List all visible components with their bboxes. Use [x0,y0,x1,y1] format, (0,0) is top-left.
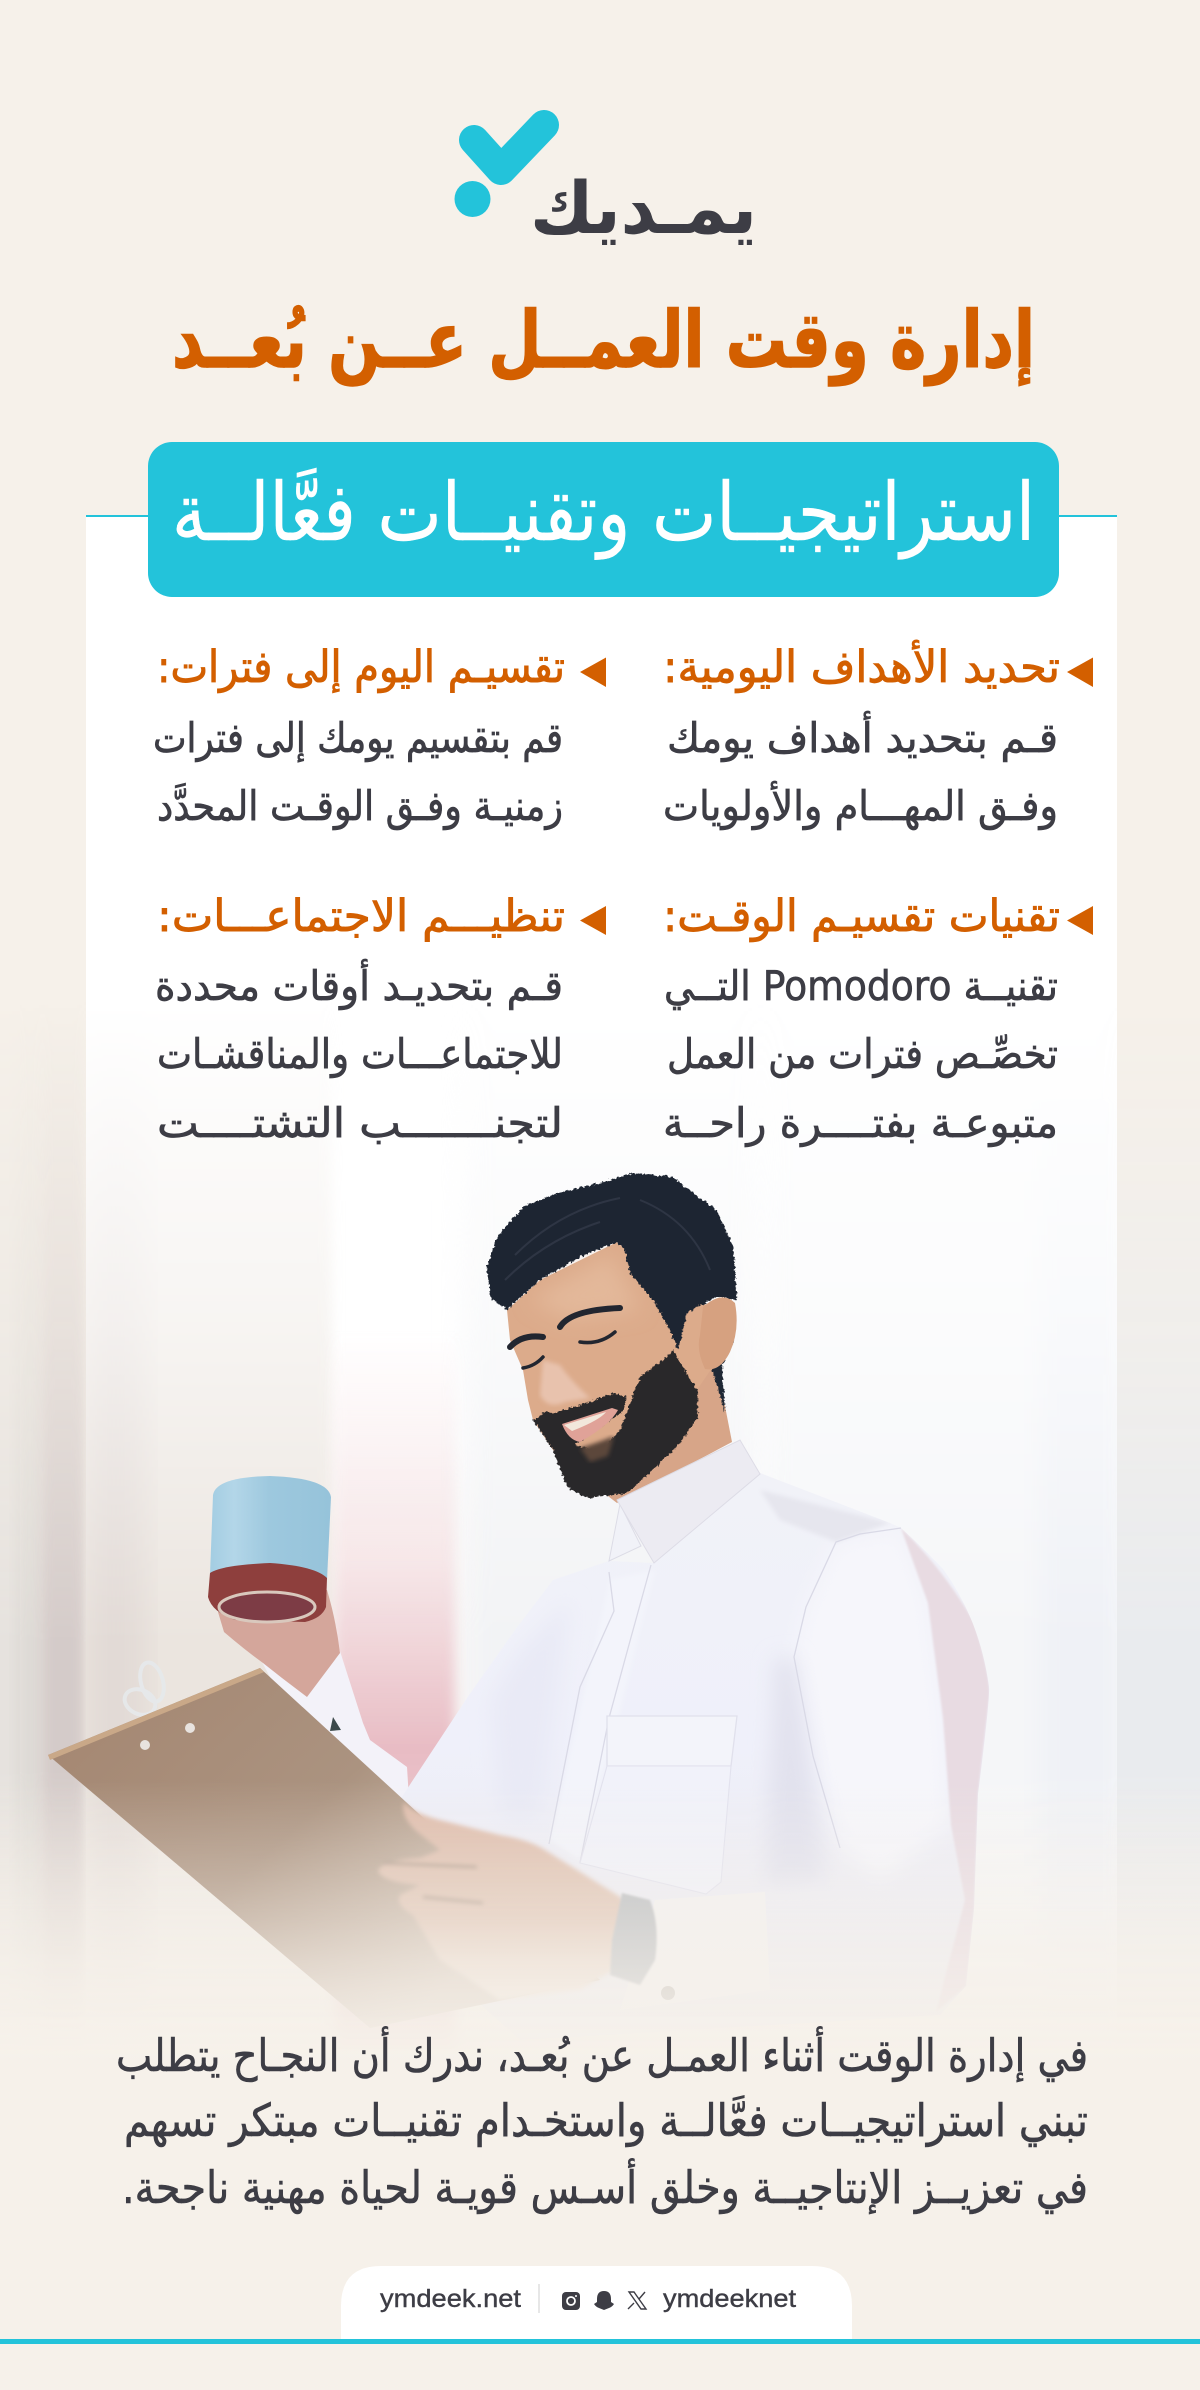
closing paragraph: في تعزيــز الإنتاجيــة وخلق أسـس قويـة لحياة مهنية ناجحة. [122,2158,1088,2215]
chest pocket [580,1716,737,1894]
shirt seams and placket lines [549,1528,901,1863]
bullet arrow [580,906,606,935]
bullet arrow [580,658,606,687]
cufflink [330,1717,341,1731]
social handle: ymdeeknet [663,2285,796,2313]
illustration: man holding mug and clipboard [48,1173,989,2040]
body text: زمنيـة وفـق الوقـت المحدَّد [157,782,563,830]
mug blue body [210,1476,331,1580]
shirt cuff at wrist [620,1892,770,2010]
footer contact pill [341,2266,852,2339]
icon: instagram [562,2292,580,2310]
mug red base [208,1563,327,1622]
mouth [562,1408,618,1442]
forehead highlight [530,1255,640,1320]
cuff button [661,1986,675,2000]
bullet arrow [1067,658,1093,687]
body text: تخصِّـص فترات من العمل [667,1030,1058,1078]
logo wordmark: يمـديك [530,166,757,250]
blurred curtain photo background, side strips [0,1156,1200,1936]
white content panel [86,517,1117,2077]
teal rule at top of panel [86,515,1117,517]
pink curtain band [335,1330,455,2050]
logo check mark [474,125,544,170]
body text: قم بتقسيم يومك إلى فترات [153,714,563,762]
body text [663,711,1058,830]
body text [155,959,563,1147]
chin tint [580,1436,614,1462]
body text: لتجنـــــــب التشتــــت [157,1099,563,1147]
hair [487,1173,737,1350]
body text: وفـق المهـــام والأولويات [663,780,1058,830]
bottom fade into page background [0,1780,1200,2080]
holding hand [378,1802,640,2000]
heading: تقسيـم اليوم إلى فترات: [157,642,565,693]
body text: قـم بتحديـد أوقات محددة [155,959,563,1010]
closing paragraph [116,2026,1088,2215]
blurred curtain photo background, inside panel [86,1165,1117,1913]
wristwatch [610,1893,657,1985]
mug [208,1476,331,1622]
hair highlights [505,1198,710,1280]
mug underside ring [219,1592,315,1622]
heading: تقنيات تقسيـم الوقـت: [663,891,1060,942]
ear [699,1297,737,1369]
bullet arrow [1067,906,1093,935]
section: daily goals [663,639,1093,830]
section: time-splitting techniques [663,891,1093,1147]
heading: تحديد الأهداف اليومية: [663,639,1060,693]
icon: snapchat [594,2291,614,2310]
subtitle banner [148,442,1059,597]
closing paragraph: تبني استراتيجيــات فعَّالــة واستخـدام تقنيــات مبتكر تسهم [124,2094,1088,2148]
icon: X [628,2292,646,2309]
shirt body [400,1473,989,2040]
section: dividing the day [153,642,606,830]
beard [533,1350,698,1498]
logo [454,125,757,250]
nose [540,1360,590,1405]
body text [663,962,1058,1147]
divider [538,2284,540,2313]
logo dot [454,181,490,217]
neck [600,1360,732,1503]
section: organising meetings [155,891,606,1147]
upper hand holding mug [218,1590,340,1697]
body text: تقنيــة Pomodoro التــي [664,962,1058,1011]
clipboard [48,1668,600,2028]
eyebrows and eyes [510,1308,620,1368]
hair behind ear [712,1340,735,1412]
body text: قـم بتحديد أهداف يومك [667,711,1058,762]
clipboard holes [140,1740,150,1750]
subtitle banner: استراتيجيــات وتقنيــات فعَّالــة [172,466,1035,560]
body text: للاجتماعـــات والمناقشـات [157,1030,563,1078]
website: ymdeek.net [380,2285,521,2313]
body text [153,714,563,830]
shirt collar [609,1440,760,1563]
clipboard metal clip [120,1660,168,1720]
body text: متبوعـة بفتــــرة راحــة [663,1099,1058,1147]
shirt sleeve cuff behind clipboard [262,1645,410,1815]
footer teal line [0,2339,1200,2344]
heading: تنظيـــم الاجتماعـــات: [157,891,565,942]
face [507,1242,712,1495]
